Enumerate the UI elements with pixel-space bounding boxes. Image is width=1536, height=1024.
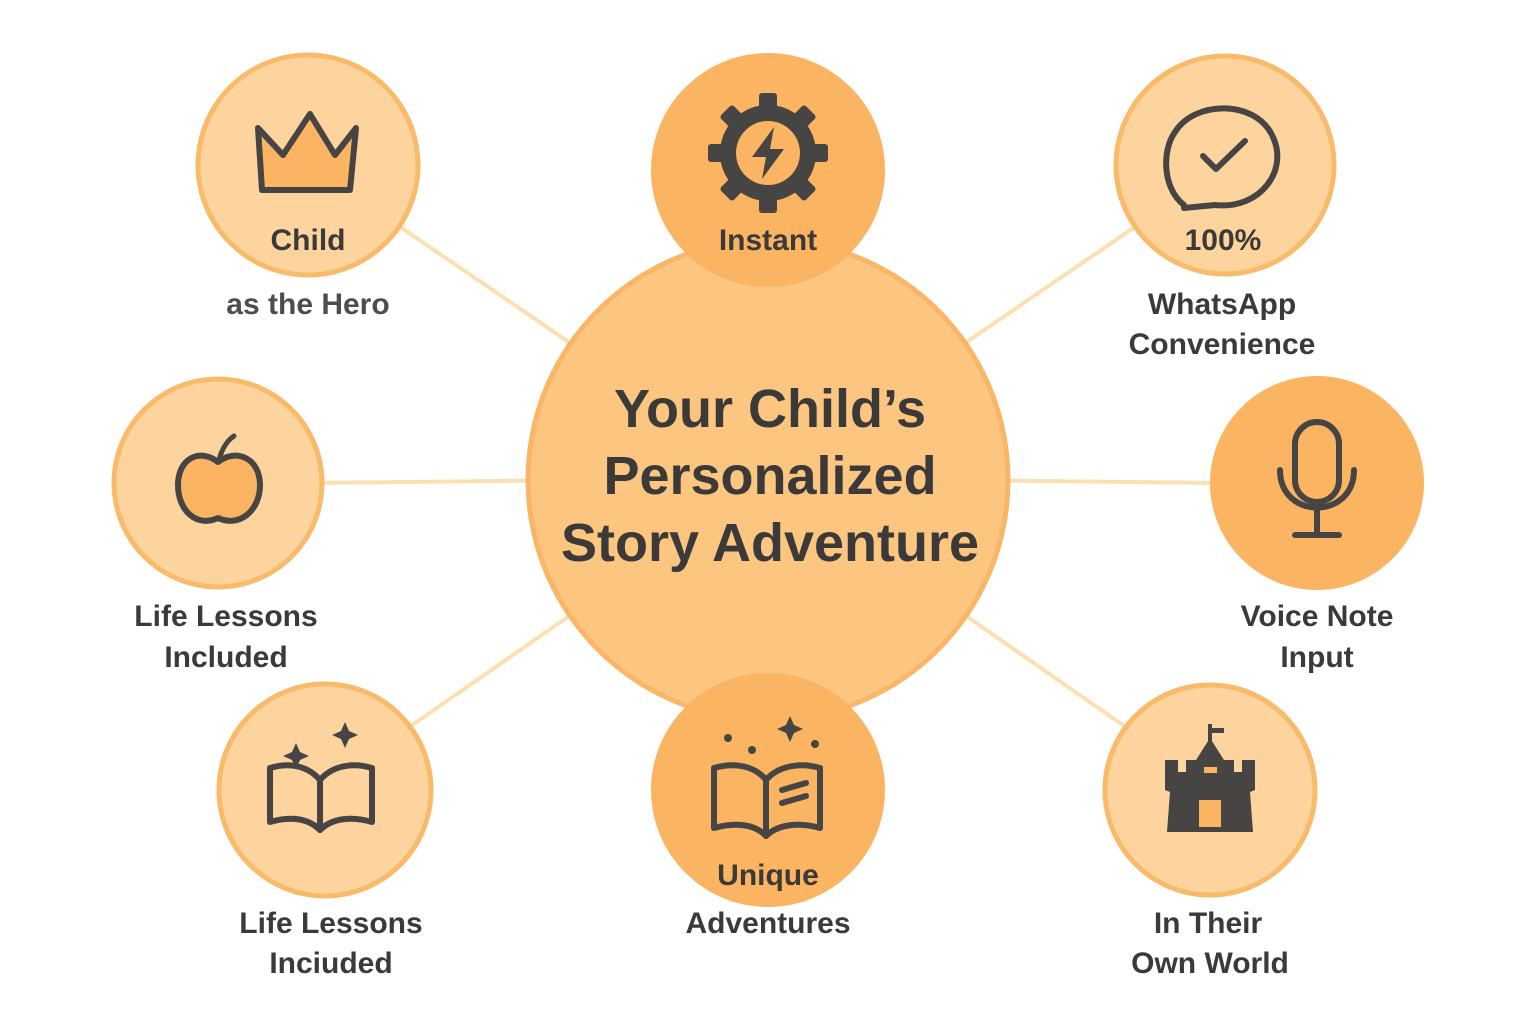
node: WhatsApp Convenience: WhatsApp — [1148, 288, 1296, 321]
icon: apple — [178, 456, 260, 521]
node: Child as the Hero: Child — [270, 224, 346, 257]
icon: castle — [1165, 724, 1255, 832]
node: Unique Adventures: Adventures — [685, 907, 851, 940]
node: Voice Note Input — [1210, 376, 1424, 674]
node: In Their Own World: Own World — [1131, 947, 1289, 980]
node: Instant: Instant — [719, 224, 817, 257]
title: Story Adventure — [561, 513, 979, 573]
node: Life Lessons Included (left): Included — [164, 641, 288, 674]
icon: chat bubble with check — [1166, 108, 1277, 208]
node: Life Lessons Inciuded (bottom left): Life Lessons — [239, 907, 423, 940]
icon: open book with sparkles — [270, 765, 372, 830]
node: In Their Own World — [1105, 685, 1315, 980]
node: Unique Adventures — [651, 673, 885, 940]
node: Life Lessons Inciuded (bottom left): Inciuded — [269, 947, 393, 980]
icon: gear with lightning — [708, 93, 828, 213]
icon: crown — [258, 114, 356, 190]
connector lines — [310, 220, 1220, 730]
node: Unique Adventures: Unique — [717, 859, 819, 892]
node: In Their Own World: In Their — [1154, 907, 1262, 940]
node: Voice Note Input: Input — [1280, 641, 1354, 674]
node: Voice Note Input: Voice Note — [1241, 600, 1393, 633]
node: WhatsApp Convenience — [1116, 56, 1334, 361]
central hub — [528, 240, 1008, 720]
node: Child as the Hero: as the Hero — [226, 288, 390, 321]
node: Life Lessons Included (left): Life Lessons — [134, 600, 318, 633]
icon: microphone — [1280, 422, 1354, 535]
node: Child as the Hero — [198, 55, 418, 321]
title: Personalized — [603, 446, 937, 506]
node: Life Lessons Included (left) — [114, 379, 322, 674]
title — [561, 379, 979, 573]
node: Life Lessons Inciuded (bottom left) — [219, 684, 431, 980]
title: Your Child’s — [614, 379, 926, 439]
node: WhatsApp Convenience: Convenience — [1129, 328, 1315, 361]
node: WhatsApp Convenience: 100% — [1185, 224, 1261, 257]
icon: open book with stars — [714, 765, 820, 836]
node: Instant — [651, 53, 885, 287]
